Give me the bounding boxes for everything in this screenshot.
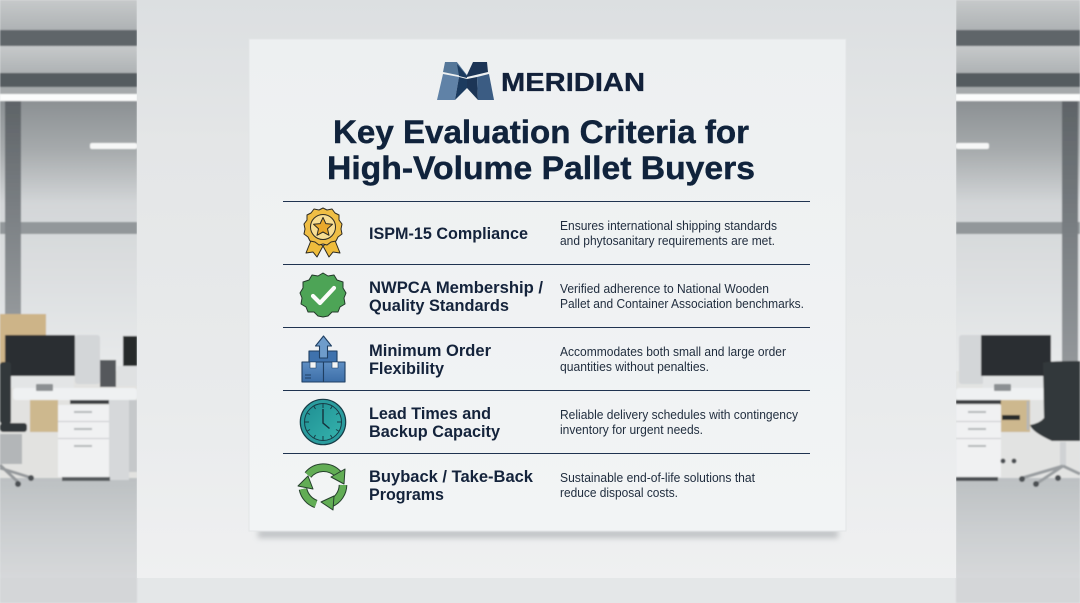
- label: [369, 467, 534, 504]
- description: reduce disposal costs.: [560, 486, 678, 500]
- icon: boxes with up arrow: [302, 336, 345, 382]
- label: ISPM-15 Compliance: [369, 224, 528, 243]
- description: Ensures international shipping standards: [560, 219, 777, 233]
- label: NWPCA Membership /: [369, 278, 543, 297]
- description: quantities without penalties.: [560, 360, 709, 374]
- description: inventory for urgent needs.: [560, 423, 703, 437]
- wordmark: MERIDIAN: [501, 69, 645, 97]
- label: Minimum Order: [369, 341, 491, 360]
- label: Programs: [369, 485, 444, 504]
- description: [560, 345, 786, 374]
- description: Reliable delivery schedules with contingency: [560, 408, 799, 422]
- description: [560, 408, 799, 437]
- label: Backup Capacity: [369, 422, 501, 441]
- label: Quality Standards: [369, 296, 509, 315]
- description: Pallet and Container Association benchmarks.: [560, 297, 804, 311]
- description: and phytosanitary requirements are met.: [560, 234, 775, 248]
- icon: recycle arrows: [298, 468, 345, 510]
- row: NWPCA Membership: [300, 273, 804, 317]
- description: [560, 219, 777, 248]
- label: Buyback / Take-Back: [369, 467, 534, 486]
- feature wall: [137, 0, 956, 578]
- row: Buyback / Take-Back Programs: [298, 467, 756, 510]
- background: warehouse office, left side: [0, 0, 137, 603]
- logo mark: [437, 62, 494, 100]
- logo: Meridian: [437, 62, 645, 100]
- title: High-Volume Pallet Buyers: [327, 150, 755, 186]
- icon: award ribbon: [304, 208, 342, 257]
- row: ISPM-15 Compliance: [304, 208, 777, 257]
- description: Verified adherence to National Wooden: [560, 282, 769, 296]
- label: Flexibility: [369, 359, 445, 378]
- label: [369, 278, 543, 315]
- description: [560, 471, 756, 500]
- background: warehouse office, right side: [956, 0, 1080, 603]
- title: Key Evaluation Criteria for: [333, 114, 749, 150]
- title: [327, 114, 755, 186]
- row: Minimum Order Flexibility: [302, 336, 786, 382]
- description: [560, 282, 804, 311]
- icon: green check badge: [300, 273, 346, 317]
- row: Lead Times and Backup Capacity: [300, 399, 799, 445]
- icon: clock: [300, 399, 346, 445]
- label: [369, 341, 491, 378]
- board shadow: [258, 530, 838, 538]
- description: Sustainable end-of-life solutions that: [560, 471, 756, 485]
- label: Lead Times and: [369, 404, 491, 423]
- description: Accommodates both small and large order: [560, 345, 786, 359]
- label: [369, 404, 501, 441]
- panel: criteria board: [249, 39, 846, 531]
